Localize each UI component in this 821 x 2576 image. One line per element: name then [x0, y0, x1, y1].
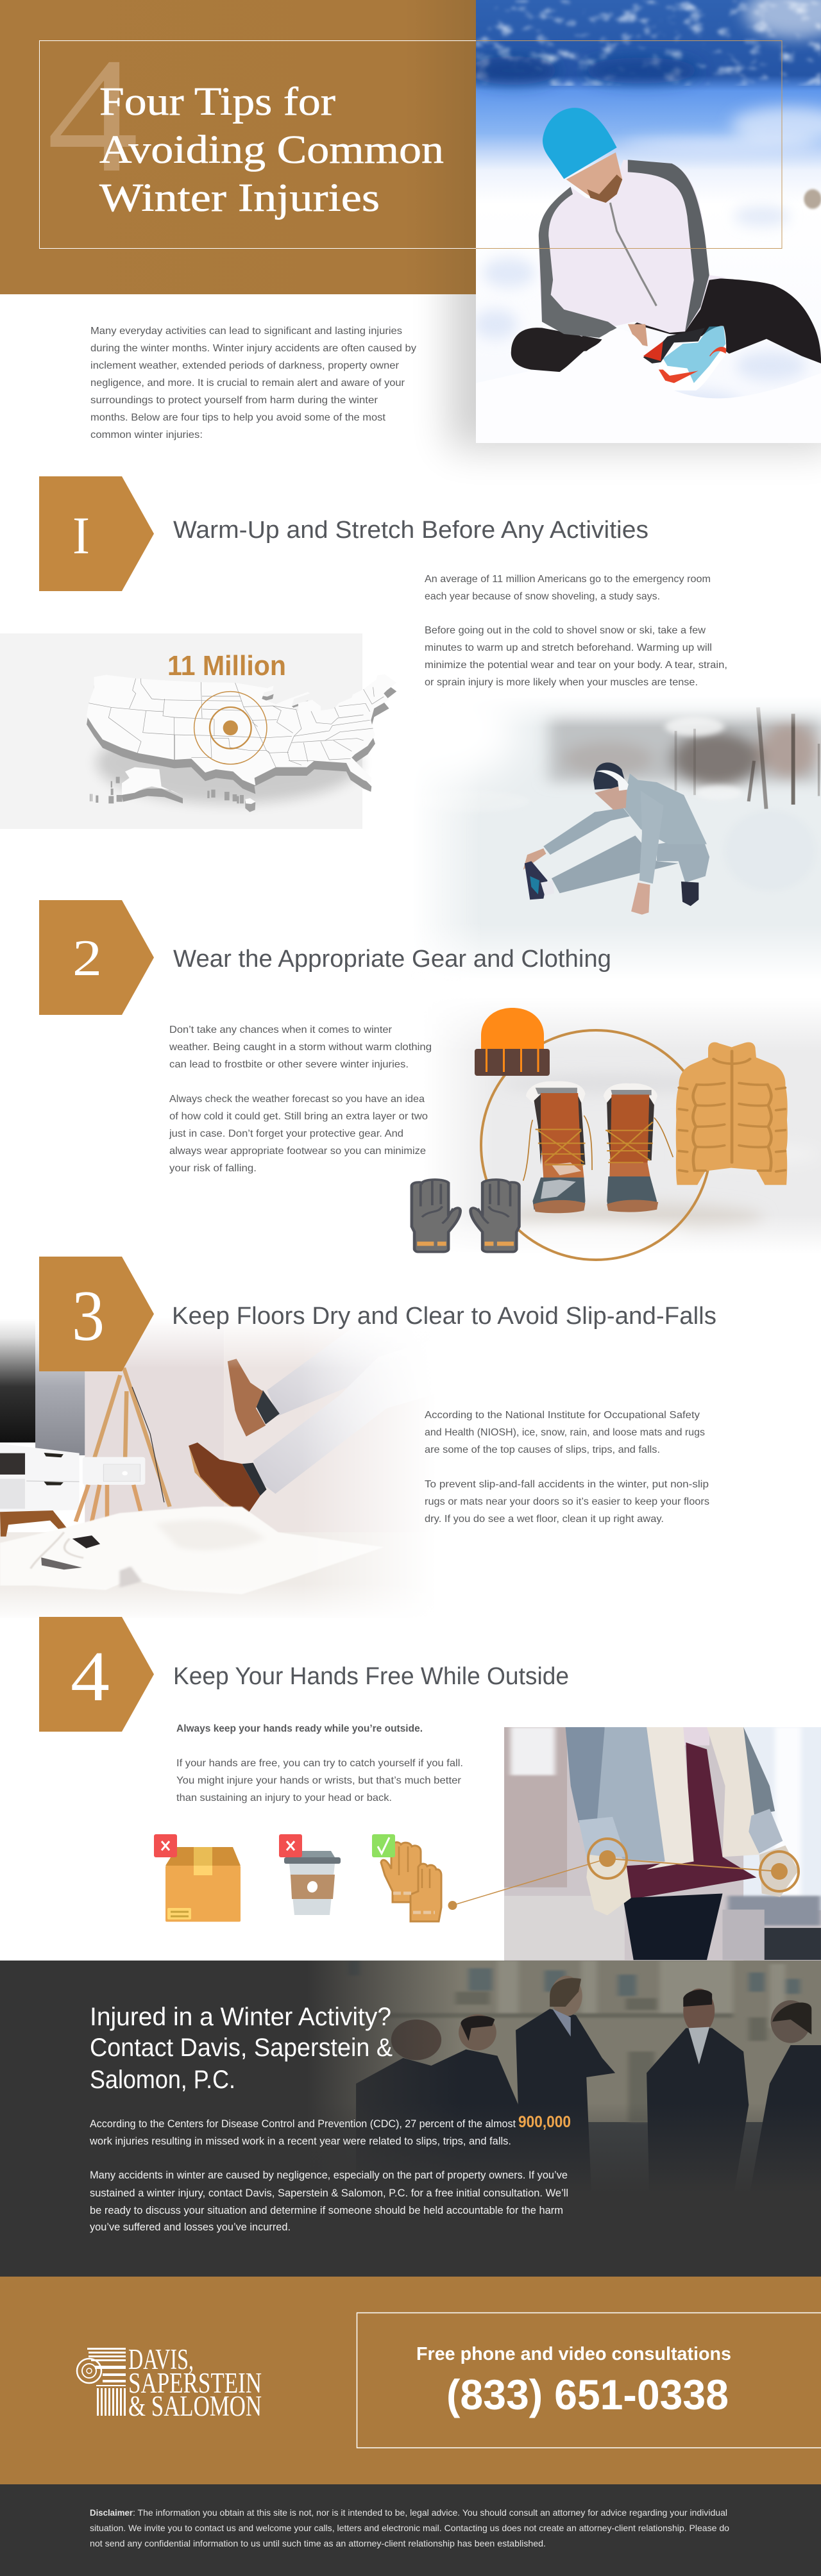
legs: [511, 328, 605, 372]
map shadow: [96, 723, 361, 803]
photo: man stretching in snow: [434, 707, 821, 960]
rock: [804, 189, 821, 209]
intro paragraph: Many everyday activities can lead to significant and lasting injuries: [90, 326, 402, 337]
disclaimer: : The information you obtain at this site is not, nor is it intended to be, legal advice. You should consult an attorney for advice regarding your individual: [133, 2507, 727, 2518]
sleeves: [566, 1727, 605, 1823]
section 1 badge: [39, 476, 154, 591]
logo wordmark: DAVIS,: [128, 2343, 194, 2375]
section 2 body: weather. Being caught in a storm without warm clothing: [169, 1042, 432, 1053]
section 2 body: can lead to frostbite or other severe winter injuries.: [169, 1059, 409, 1070]
rug: [0, 1507, 384, 1594]
closing body: 900,000: [518, 2113, 571, 2131]
hands: [523, 848, 546, 870]
section 1 body: each year because of snow shoveling, a study says.: [425, 591, 660, 602]
hand: [628, 324, 648, 346]
closing body: sustained a winter injury, contact Davis, Saperstein & Salomon, P.C. for a free initial consultation. We’ll: [90, 2187, 568, 2199]
section 3 heading: Keep Floors Dry and Clear to Avoid Slip-and-Falls: [172, 1303, 716, 1330]
socks: [256, 1390, 280, 1425]
icon: hat: [475, 1008, 550, 1076]
map extrusion: [87, 683, 396, 794]
map panel: [0, 633, 362, 829]
section 3 body: dry. If you do see a wet floor, clean it up right away.: [425, 1514, 664, 1525]
closing body: [89, 2113, 571, 2233]
pants: [267, 1362, 340, 1416]
icon: box with red X: [154, 1834, 241, 1922]
closing heading: Contact Davis, Saperstein &: [90, 2034, 393, 2062]
intro paragraph: inclement weather, extended periods of darkness, property owner: [90, 360, 400, 371]
face: [566, 153, 622, 203]
icon: coffee cup with red X: [279, 1834, 341, 1915]
side table: [83, 1457, 145, 1485]
photo: boots on snow: [452, 1019, 821, 1240]
section 1 heading: Warm-Up and Stretch Before Any Activities: [173, 517, 648, 544]
closing heading: Salomon, P.C.: [90, 2066, 235, 2094]
state lines: [89, 678, 384, 767]
closing heading: [90, 2003, 393, 2094]
disclaimer: situation. We invite you to contact us and welcome your calls, letters and electronic mail. Contacting us does not create an attorney-client relationship. Please do: [90, 2523, 729, 2533]
top: [683, 1727, 709, 1745]
photo: legal team: [282, 1961, 821, 2207]
consultation label: Free phone and video consultations: [416, 2344, 731, 2364]
disclaimer band: [0, 2484, 821, 2576]
section 2 body: Don’t take any chances when it comes to winter: [169, 1025, 393, 1035]
closing body: work injuries resulting in missed work in a recent year were related to slips, trips, and falls.: [89, 2135, 511, 2147]
extended leg: [552, 835, 679, 893]
head: [595, 784, 627, 810]
section 2 body: just in case. Don’t forget your protective gear. And: [169, 1128, 403, 1139]
section 3 body: According to the National Institute for Occupational Safety: [425, 1410, 700, 1421]
disclaimer: not send any confidential information to us until such time as an attorney-client relationship has been established.: [90, 2538, 546, 2548]
hat: [543, 108, 617, 179]
title: [99, 80, 444, 220]
section 1 body: Before going out in the cold to shovel snow or ski, take a few: [425, 625, 706, 636]
logo: [77, 2343, 262, 2422]
logo wordmark: [128, 2343, 262, 2422]
big numeral 4 behind title: 4: [47, 24, 139, 206]
photo: injured man in snow: [468, 0, 821, 449]
title: Winter Injuries: [99, 176, 380, 220]
statistic: 11 Million: 11 Million: [167, 650, 286, 682]
section 4 body: If your hands are free, you can try to catch yourself if you fall.: [176, 1758, 463, 1769]
section 3 badge: [39, 1257, 154, 1371]
phone number: (833) 651-0338: [446, 2371, 729, 2418]
section 2 body: Always check the weather forecast so you have an idea: [169, 1094, 425, 1105]
section 1 body: or sprain injury is more likely when your muscles are tense.: [425, 677, 698, 688]
header band: [0, 0, 476, 294]
closing body: be ready to discuss your situation and determine if someone should be held accountable for the harm: [90, 2204, 563, 2216]
mittens: [586, 1855, 631, 1915]
section 3 body: are some of the top causes of slips, trips, and falls.: [425, 1444, 660, 1455]
section 2 body: always wear appropriate footwear so you can minimize: [169, 1146, 426, 1157]
logo wordmark: SAPERSTEIN: [128, 2367, 262, 2399]
intro paragraph: surroundings to protect yourself from harm during the winter: [90, 395, 378, 406]
shoes: [525, 861, 548, 899]
section 2 body: of how cold it could get. Still bring an extra layer or two: [169, 1111, 428, 1122]
section 4 badge: [39, 1617, 154, 1732]
closing body: you’ve suffered and losses you’ve incurred.: [90, 2221, 291, 2233]
disclaimer: Disclaimer: [90, 2507, 133, 2518]
closing band: [0, 1961, 821, 2277]
section 3 body: and Health (NIOSH), ice, snow, rain, and loose mats and rugs: [425, 1427, 705, 1438]
target rings: [194, 692, 267, 764]
intro paragraph: negligence, and more. It is crucial to remain alert and aware of your: [90, 378, 405, 389]
photo fades: [410, 696, 481, 1003]
phone box: [357, 2313, 821, 2448]
photo: hands free: [504, 1727, 821, 1961]
hoodie: [622, 774, 707, 844]
section 4 heading: Keep Your Hands Free While Outside: [173, 1663, 569, 1690]
bent leg: [657, 842, 709, 882]
section 4 body: [176, 1723, 463, 1803]
section 2 heading: Wear the Appropriate Gear and Clothing: [173, 946, 611, 973]
section 4 body: Always keep your hands ready while you’re outside.: [176, 1723, 423, 1734]
section 4 body: You might injure your hands or wrists, but that’s much better: [176, 1775, 462, 1786]
closing heading: Injured in a Winter Activity?: [90, 2003, 391, 2031]
section 3 badge: 3: [72, 1276, 105, 1356]
section 3 body: [425, 1410, 709, 1525]
snow shading: [476, 203, 806, 399]
gear ring: [481, 1030, 711, 1260]
US map: [87, 674, 396, 812]
team figures: [356, 2009, 821, 2199]
scarf: [647, 1727, 694, 1869]
upper shoe: [228, 1359, 266, 1437]
section 2 badge: [39, 900, 154, 1015]
shoe: [670, 326, 726, 390]
jacket: [539, 160, 727, 337]
section 1 body: [425, 574, 727, 688]
section 2 body: your risk of falling.: [169, 1163, 257, 1174]
cardigan: [597, 1727, 665, 1862]
map land: [87, 674, 396, 785]
closing body: According to the Centers for Disease Control and Prevention (CDC), 27 percent of the almost: [90, 2118, 516, 2130]
photo: falling person and rug: [0, 1323, 399, 1609]
lower shoe: [189, 1443, 260, 1516]
icon: jacket: [676, 1042, 788, 1185]
leggings: [623, 1894, 722, 1960]
intro paragraph: during the winter months. Winter injury accidents are often caused by: [90, 343, 416, 354]
snow mound: [489, 330, 804, 436]
lamp: [94, 1367, 170, 1507]
logo column: [77, 2348, 126, 2416]
intro paragraph: common winter injuries:: [90, 430, 203, 440]
icon: boots: [523, 1081, 673, 1213]
contact band: [0, 2277, 821, 2484]
alaska: [122, 780, 183, 803]
section 1 body: minimize the potential wear and tear on your body. A tear, strain,: [425, 660, 727, 671]
cuffs: [579, 1817, 625, 1857]
console: [0, 1444, 80, 1512]
closing body: Many accidents in winter are caused by negligence, especially on the part of property owners. If you’ve: [90, 2169, 568, 2181]
icon: free hands with green check: [372, 1834, 441, 1921]
logo wordmark: & SALOMON: [128, 2390, 262, 2422]
intro paragraph: months. Below are four tips to help you avoid some of the most: [90, 412, 386, 423]
section 1 body: minutes to warm up and stretch beforehand. Warming up will: [425, 642, 712, 653]
icon: gloves: [412, 1180, 519, 1252]
photo shadow: hero: [449, 19, 821, 449]
section 1 body: An average of 11 million Americans go to the emergency room: [425, 574, 711, 585]
hawaii: [207, 790, 255, 812]
title: Avoiding Common: [99, 128, 444, 172]
skirt: [623, 1743, 757, 1899]
section 4 badge: 4: [71, 1637, 110, 1716]
title frame: [40, 41, 782, 249]
title: Four Tips for: [99, 80, 335, 124]
section 1 badge: I: [72, 506, 90, 565]
section 2 body: [169, 1025, 432, 1174]
section 2 badge: 2: [72, 929, 102, 987]
disclaimer: [90, 2507, 729, 2548]
section 4 body: than sustaining an injury to your head or back.: [176, 1793, 392, 1803]
section 3 body: To prevent slip-and-fall accidents in the winter, put non-slip: [425, 1479, 709, 1490]
intro paragraph: [90, 326, 416, 440]
section 3 body: rugs or mats near your doors so it’s easier to keep your floors: [425, 1496, 709, 1507]
callout rings and pointer: [448, 1839, 799, 1910]
